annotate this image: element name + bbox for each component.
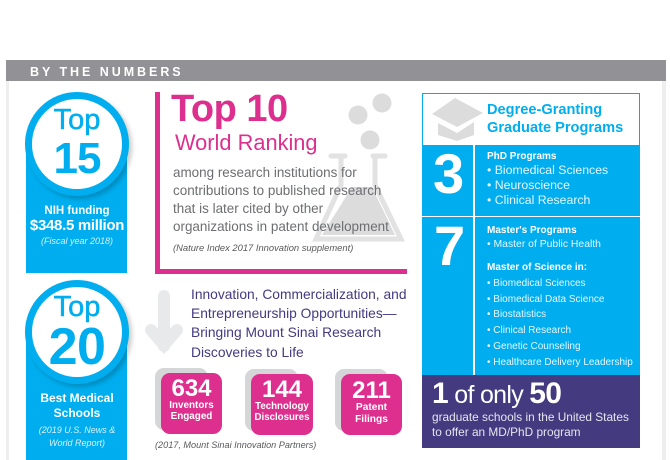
callout headline: 1 of only 50 [432, 377, 561, 410]
left page edge [6, 81, 9, 460]
icon: graduation cap [432, 98, 483, 141]
PhD section background [422, 145, 640, 216]
PhD items: • Biomedical Sciences [487, 163, 608, 177]
PhD programs list [487, 151, 608, 207]
callout text: to offer an MD/PhD program [432, 425, 581, 439]
panel: Top 10 World Ranking [155, 88, 407, 274]
label [255, 401, 310, 423]
value: 634 [171, 375, 212, 402]
card face [251, 374, 313, 435]
card shadow [245, 369, 298, 431]
description: contributions to published research [173, 183, 381, 198]
15 number: 15 [54, 134, 100, 183]
icon: down arrow [145, 290, 183, 354]
panel: Top 20 Best Medical Schools [25, 280, 134, 460]
Master of Science items: • Healthcare Delivery Leadership [487, 357, 633, 368]
PhD title: PhD Programs [487, 151, 556, 162]
fiscal year note: (Fiscal year 2018) [41, 236, 113, 246]
funding amount: $348.5 million [30, 217, 124, 234]
number 3: 3 [433, 142, 464, 205]
Master of Science items: • Biostatistics [487, 309, 546, 320]
blue ribbon [26, 332, 127, 460]
Top label: Top [54, 104, 100, 136]
innovation heading: Discoveries to Life [191, 345, 304, 360]
PhD items: • Neuroscience [487, 178, 570, 192]
panel: Top 15 NIH funding [25, 92, 134, 273]
Master of Science items: • Biomedical Sciences [487, 278, 586, 289]
card shadow [335, 369, 388, 431]
value: 211 [352, 377, 391, 404]
label [355, 402, 388, 425]
source note [39, 425, 115, 448]
Master of Science items: • Clinical Research [487, 325, 571, 336]
column divider [473, 145, 475, 376]
stat card: inventors engaged [155, 368, 222, 434]
panel header outline [422, 93, 640, 145]
blue ribbon [26, 142, 127, 273]
callout text: graduate schools in the United States [432, 410, 629, 424]
best medical schools label: Schools [54, 406, 100, 420]
purple callout [422, 375, 640, 448]
Master of Science items: • Biomedical Data Science [487, 294, 604, 305]
label: Inventors [169, 400, 214, 411]
innovation heading [191, 287, 406, 360]
label: Filings [355, 414, 388, 425]
value: 144 [262, 376, 302, 403]
best medical schools label: Best Medical [40, 391, 114, 405]
20 number: 20 [49, 318, 105, 376]
innovation heading: Entrepreneurship Opportunities— [191, 306, 397, 321]
label: Patent [356, 402, 387, 413]
innovation heading: Bringing Mount Sinai Research [191, 325, 381, 340]
number 7: 7 [434, 214, 465, 277]
label [169, 400, 214, 422]
card shadow [155, 368, 208, 430]
callout text [432, 410, 629, 439]
PhD items: • Clinical Research [487, 193, 590, 207]
innovation heading: Innovation, Commercialization, and [191, 287, 406, 302]
description: among research institutions for [173, 165, 357, 180]
magenta bottom border [155, 269, 407, 274]
Master's title: Master's Programs [487, 225, 577, 236]
label: Engaged [171, 411, 212, 422]
card face [161, 373, 222, 434]
panel heading [487, 102, 623, 136]
source note: (2019 U.S. News & [39, 425, 115, 435]
Master's item: • Master of Public Health [487, 239, 601, 250]
label: Disclosures [255, 412, 309, 423]
circle badge [25, 92, 129, 196]
panel: degree-granting programs [422, 93, 640, 448]
magenta left border [155, 92, 160, 274]
Master of Science title: Master of Science in: [487, 262, 587, 273]
header bar [6, 60, 666, 81]
header title: BY THE NUMBERS [30, 65, 184, 79]
description: that is later cited by other [173, 201, 323, 216]
panel heading: Graduate Programs [487, 120, 623, 136]
Master's section background [422, 217, 640, 376]
PhD items [487, 163, 608, 207]
Master's programs list [487, 225, 633, 368]
stat source note: (2017, Mount Sinai Innovation Partners) [155, 440, 316, 450]
panel heading: Degree-Granting [487, 102, 602, 118]
Master of Science items: • Genetic Counseling [487, 341, 581, 352]
description [173, 165, 389, 234]
source note: (Nature Index 2017 Innovation supplement) [173, 242, 353, 253]
Top label: Top [54, 291, 100, 323]
description: organizations in patent development [173, 219, 389, 234]
World Ranking subheading: World Ranking [175, 130, 318, 155]
Master of Science items [487, 278, 633, 368]
best medical schools label [40, 391, 114, 420]
stat card: patent filings [335, 369, 402, 435]
Top 10 heading: Top 10 [171, 88, 288, 130]
right page edge [662, 81, 666, 460]
icon: flask and bubbles [312, 94, 405, 242]
NIH funding label: NIH funding [44, 205, 110, 217]
card face [341, 374, 402, 435]
label: Technology [255, 401, 309, 412]
circle badge [25, 280, 129, 384]
stat card: technology disclosures [245, 369, 313, 435]
source note: World Report) [49, 438, 105, 448]
